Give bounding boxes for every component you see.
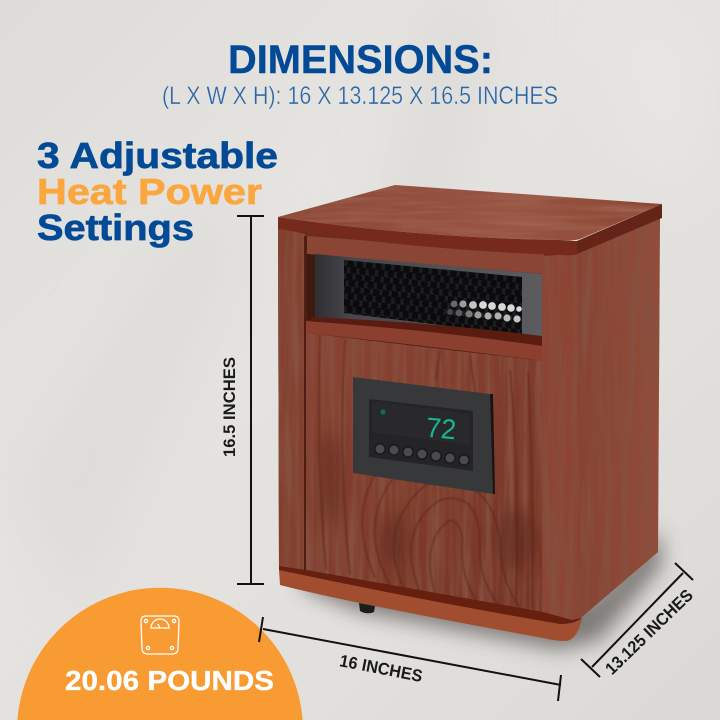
subtitle: dimensions: (L X W X H): 16 X 13.125 X 16.5 INCHES <box>162 82 558 110</box>
heater right column <box>542 254 577 622</box>
heater left column <box>278 228 306 570</box>
heater base <box>279 566 582 641</box>
vent <box>307 254 542 340</box>
heater backing <box>278 228 578 624</box>
heater right side <box>576 218 660 622</box>
control buttons <box>375 444 469 465</box>
heater top edge <box>278 217 577 255</box>
caster wheel <box>359 603 375 613</box>
heater top <box>278 185 662 240</box>
heading: heat power settings: Heat Power <box>37 171 262 212</box>
upper band <box>307 236 544 274</box>
wood grain lines <box>319 335 532 608</box>
status light <box>380 410 386 414</box>
display screen <box>372 401 470 445</box>
heading: heat power settings <box>37 135 278 248</box>
floor shadow <box>300 530 662 650</box>
heading: heat power settings: 3 Adjustable <box>37 135 278 176</box>
height dimension line <box>237 216 264 584</box>
width dimension line <box>259 617 561 701</box>
heating grille <box>344 260 522 335</box>
depth dimension line <box>581 563 693 677</box>
icon: scale <box>141 616 179 654</box>
depth label: 13.125 INCHES <box>602 586 697 678</box>
heading: heat power settings: Settings <box>37 207 194 248</box>
weight text: 20.06 POUNDS <box>65 665 274 696</box>
wood blotches <box>320 430 535 570</box>
front panel <box>306 333 543 612</box>
control panel <box>353 377 495 494</box>
height label: 16.5 INCHES <box>220 357 239 457</box>
heater side band <box>577 204 662 254</box>
heater <box>278 185 662 641</box>
title: DIMENSIONS: <box>228 38 493 82</box>
vent lip top <box>310 317 542 346</box>
width label: 16 INCHES <box>338 651 424 686</box>
heater front recess <box>304 236 545 613</box>
display temperature: 72 <box>425 412 457 445</box>
vent lip <box>306 321 543 361</box>
weight badge <box>17 588 303 720</box>
